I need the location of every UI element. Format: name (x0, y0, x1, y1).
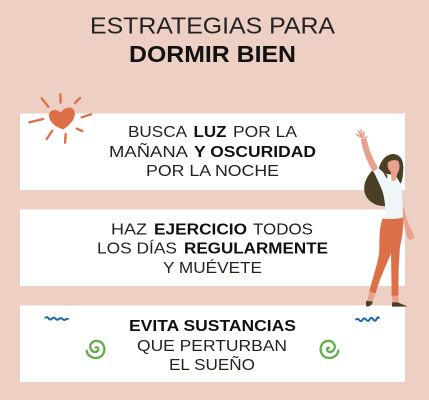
panel: sustancias (20, 306, 405, 382)
shoes (366, 301, 373, 307)
panel: luz y oscuridad: POR LA (233, 124, 298, 141)
icon: wave right (356, 317, 379, 321)
panel: luz y oscuridad: BUSCA (128, 124, 188, 141)
panel: ejercicio: LOS DÍAS (97, 240, 177, 258)
panel: ejercicio: EJERCICIO (154, 222, 247, 238)
ankles (367, 292, 376, 301)
panel: sustancias: QUE PERTURBAN (137, 338, 287, 355)
panel: ejercicio: TODOS (253, 222, 313, 238)
title (90, 12, 336, 67)
lowered arm and hand (403, 207, 415, 240)
panel: sustancias: EL SUEÑO (169, 357, 255, 374)
icon: spiral right (321, 341, 338, 358)
panel: ejercicio: REGULARMENTE (184, 240, 328, 258)
trousers (369, 217, 403, 296)
panel: ejercicio: Y MUÉVETE (163, 260, 262, 277)
panel: luz y oscuridad: MAÑANA (109, 144, 189, 161)
panel: luz y oscuridad (20, 114, 405, 190)
icon: spiral left (87, 341, 104, 358)
lower body (366, 207, 415, 307)
panel: luz y oscuridad: POR LA NOCHE (146, 163, 279, 180)
panel: luz y oscuridad: LUZ (194, 124, 226, 141)
raised arm and hand (356, 130, 378, 172)
panel: sustancias: EVITA SUSTANCIAS (129, 318, 296, 335)
icon: heart sun (29, 94, 91, 143)
panel: ejercicio (20, 210, 405, 286)
panel: ejercicio: HAZ (111, 222, 147, 238)
upper body (356, 130, 403, 219)
icon: wave left (45, 317, 68, 320)
title: DORMIR BIEN (129, 41, 296, 67)
title: ESTRATEGIAS PARA (90, 12, 336, 38)
hair back (364, 168, 387, 206)
illustration: woman waving (356, 130, 415, 307)
head and neck (388, 160, 399, 182)
panel: luz y oscuridad: Y OSCURIDAD (194, 144, 316, 161)
shirt (373, 168, 403, 219)
